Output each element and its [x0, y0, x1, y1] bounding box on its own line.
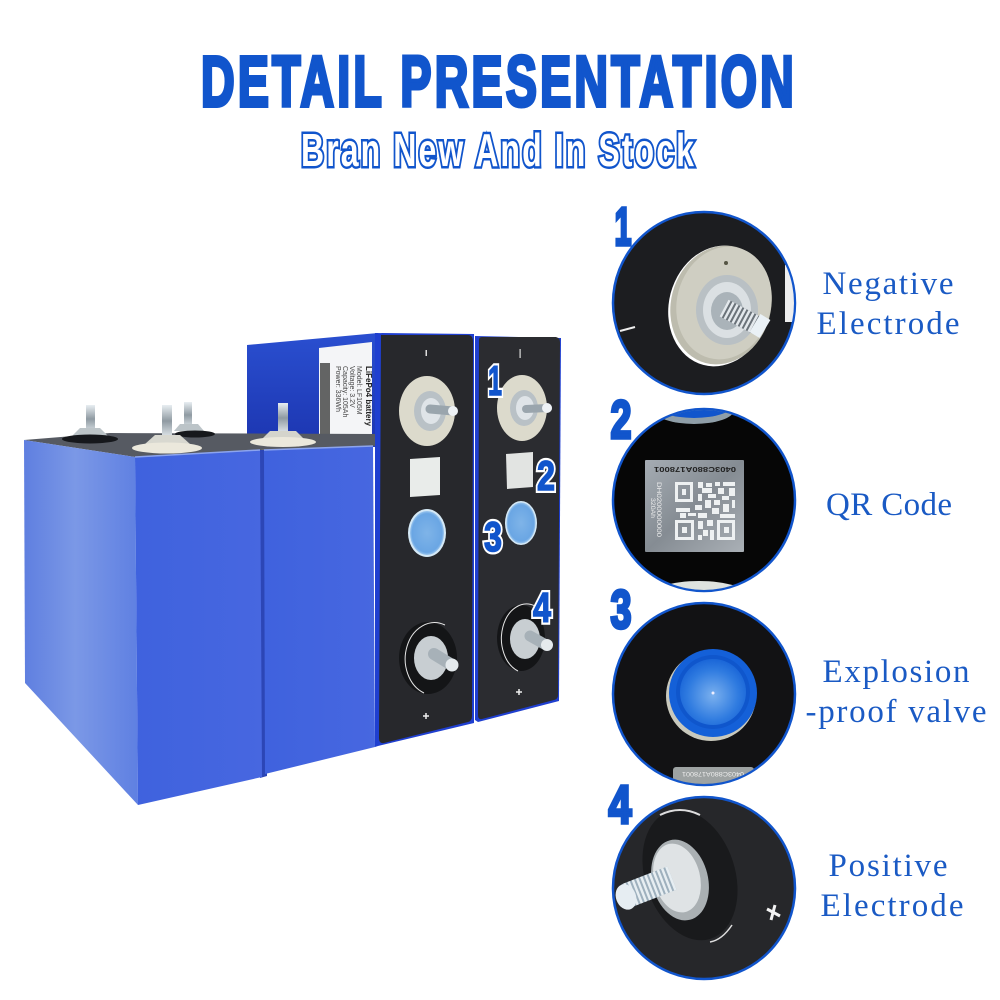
- battery label sticker: Voltage: 3.2V: [348, 366, 355, 408]
- label: Positive Electrode: Positive: [828, 848, 948, 884]
- heading number 4: 4: [608, 775, 632, 835]
- callout number 1: 1: [488, 357, 502, 404]
- cell 2 front face: [264, 446, 375, 774]
- top surface of front batteries: [24, 433, 375, 457]
- panel 2 mark: [520, 349, 521, 358]
- callout number 3: 3: [484, 513, 502, 560]
- detail circle 4: positive electrode: [612, 797, 795, 979]
- panel 2 QR patch: [506, 452, 533, 489]
- panel 1 plus sign: [423, 713, 429, 719]
- battery label sticker: Model: LF105M: [355, 366, 362, 415]
- detail circle 2: QR code: 320Ah: [649, 498, 655, 518]
- label: Negative Electrode: [816, 266, 960, 342]
- callout number 1: 1: [488, 357, 502, 404]
- heading number 3: 3: [610, 580, 632, 640]
- battery group photo: [24, 333, 561, 805]
- terminal: near white washers: [132, 403, 316, 454]
- panel 2 blue edge: [475, 336, 561, 722]
- detail circle 2: QR code: 0403C880A178001: [654, 465, 736, 474]
- front cell highlight edges: [135, 446, 373, 457]
- callout number 2: 2: [537, 452, 555, 499]
- detail circle 2: QR code: DH0200000000: [655, 482, 662, 537]
- callout number 2: 2: [537, 452, 555, 499]
- panel 2 valve: [505, 501, 537, 545]
- terminal: far bolts: [62, 402, 215, 444]
- label: Explosion-proof valve: -proof valve: [806, 694, 986, 730]
- label: Negative Electrode: Negative: [822, 266, 954, 302]
- panel 1 negative terminal: [399, 376, 458, 446]
- battery label sticker: Capacity: 105Ah: [341, 366, 348, 417]
- panel 1 black face: [379, 335, 473, 743]
- callout number 3: 3: [484, 513, 502, 560]
- subtitle: Bran New And In Stock: [301, 124, 696, 176]
- label: Explosion-proof valve: [806, 654, 986, 730]
- QR pattern: [675, 482, 735, 540]
- battery label sticker: Power: 336Wh: [334, 366, 341, 412]
- heading number 2: 2: [610, 390, 632, 450]
- callout number 4: 4: [533, 584, 551, 631]
- detail circle 3: explosion-proof valve: [613, 603, 795, 789]
- panel 2 negative terminal: [497, 375, 552, 441]
- battery label sticker: [319, 342, 373, 445]
- callout number 4: 4: [533, 584, 551, 631]
- panel 2 positive terminal: [497, 604, 553, 671]
- heading number 1: 1: [614, 197, 632, 257]
- detail circle 1: negative electrode: [613, 212, 795, 394]
- label: QR Code: QR Code: [826, 487, 952, 523]
- label: Positive Electrode: [820, 848, 964, 924]
- detail circle 2: QR code: [612, 408, 796, 592]
- panel 1 valve: [408, 509, 446, 557]
- back battery blue side: [247, 333, 378, 447]
- panel 1 mark: [426, 350, 427, 356]
- label: Negative Electrode: Electrode: [816, 306, 960, 342]
- detail circle 3: explosion-proof valve: 0403C880A178001: [681, 770, 744, 776]
- panel 2 black face: [478, 337, 560, 719]
- gap shadow between cells: [258, 450, 267, 778]
- label: Positive Electrode: Electrode: [820, 888, 964, 924]
- callout number 1: [488, 357, 502, 404]
- battery label sticker: LiFePo4 battery: [364, 366, 373, 427]
- panel 1 QR patch: [410, 457, 440, 497]
- label: Explosion-proof valve: Explosion: [822, 654, 970, 690]
- cell 1 front face: [135, 450, 262, 805]
- panel 1 blue edge: [375, 333, 474, 747]
- cell 1 light side face: [24, 440, 138, 805]
- panel 1 positive terminal: [399, 622, 458, 694]
- panel 2 plus sign: [516, 689, 522, 695]
